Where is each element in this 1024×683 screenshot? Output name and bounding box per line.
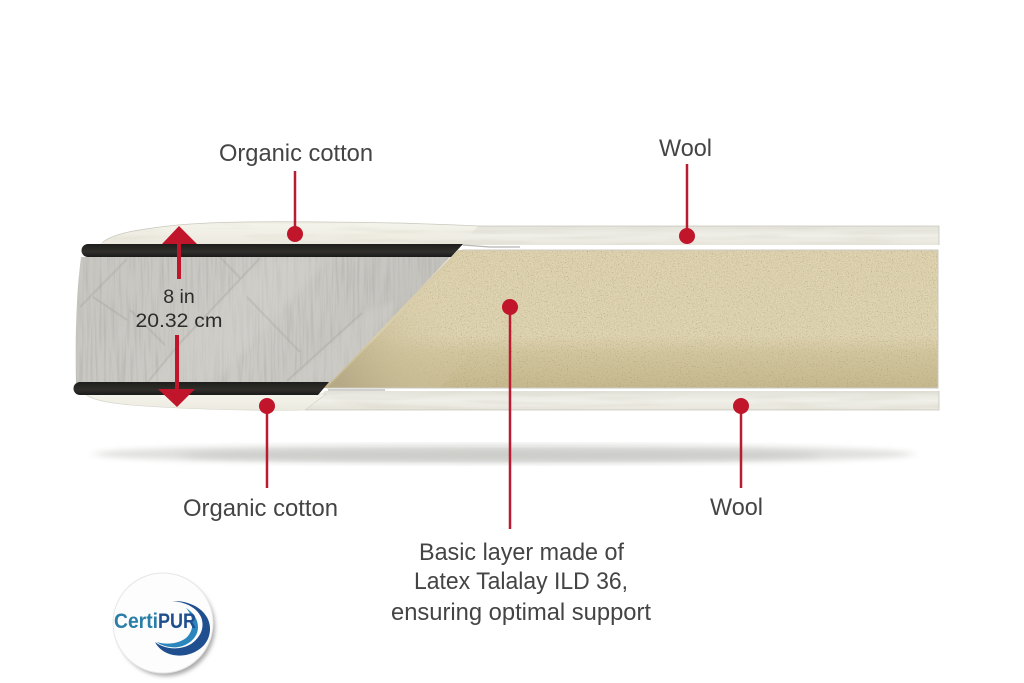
callout: top wool: Wool: [659, 135, 712, 162]
infographic: mattress cross-section: [74, 138, 940, 678]
arrow: height up: [162, 226, 197, 279]
bottom black piping: [74, 382, 329, 395]
badge: CertiPUR: Certi: [114, 610, 158, 633]
layer: bottom organic cotton: [85, 394, 326, 410]
layer: top organic cotton: [100, 220, 478, 245]
badge: CertiPUR: [113, 573, 215, 676]
top black piping: [82, 244, 463, 257]
badge: CertiPUR: PUR: [158, 610, 196, 633]
arrow: height down: [158, 335, 195, 407]
callout: latex core: Basic layer made of: [419, 539, 624, 566]
layer: bottom wool strip: [305, 390, 939, 410]
callout: top organic cotton: [219, 140, 373, 242]
callout: latex core: Latex Talalay ILD 36,: [414, 568, 628, 595]
layer: top wool strip: [460, 226, 939, 247]
callout: latex core: [391, 299, 651, 626]
callout: latex core: ensuring optimal support: [391, 599, 651, 626]
callout: top wool: [659, 135, 712, 244]
layer: quilted grey side panel: [74, 257, 454, 383]
dimension label metric: 20.32 cm: [136, 310, 222, 332]
callout: bottom wool: Wool: [710, 494, 763, 521]
dimension label: 8 in: [163, 286, 195, 308]
callout: top organic cotton: Organic cotton: [219, 140, 373, 167]
callout: bottom organic cotton: [183, 398, 338, 522]
layer: latex core: [320, 250, 938, 388]
callout: bottom wool: [710, 398, 763, 521]
floor shadow: [94, 444, 914, 464]
callout: bottom organic cotton: Organic cotton: [183, 495, 338, 522]
